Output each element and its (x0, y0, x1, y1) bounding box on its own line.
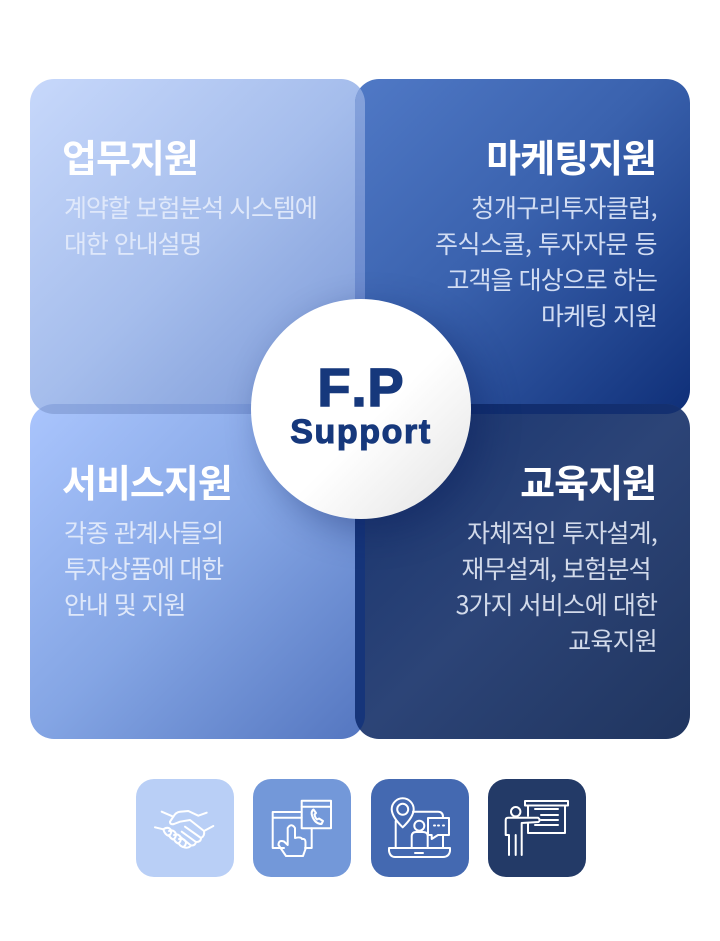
overlap: top panels (355, 88, 365, 300)
panel: education support (355, 404, 690, 739)
heading: marketing support: 마케팅지원 (486, 128, 656, 183)
overlap: bottom panels (355, 529, 365, 730)
heading: service support: 서비스지원 (62, 453, 232, 508)
panel: work support (30, 79, 365, 414)
icon: laptop with location and person (371, 779, 469, 877)
center circle: F.P Support (251, 299, 471, 519)
label: F.P: F.P (317, 358, 404, 418)
icon: web call and click (253, 779, 351, 877)
overlap: left panels (40, 404, 251, 414)
panel: service support (30, 404, 365, 739)
text: marketing support description: 청개구리투자클럽, 주식스쿨, 투자자문 등 고객을 대상으로 하는 마케팅 지원 (435, 189, 657, 333)
text: work support description: 계약할 보험분석 시스템에 대한 안내설명 (64, 189, 317, 261)
icon: handshake (136, 779, 234, 877)
label: Support: Support (290, 413, 432, 451)
panel: marketing support (355, 79, 690, 414)
text: service support description: 각종 관계사들의 투자상품에 대한 안내 및 지원 (64, 514, 223, 622)
heading: work support: 업무지원 (62, 128, 198, 183)
overlap: right panels (471, 404, 680, 414)
heading: education support: 교육지원 (520, 453, 656, 508)
text: education support description: 자체적인 투자설계, 재무설계, 보험분석 3가지 서비스에 대한 교육지원 (456, 514, 657, 658)
icon: presenter with screen (488, 779, 586, 877)
